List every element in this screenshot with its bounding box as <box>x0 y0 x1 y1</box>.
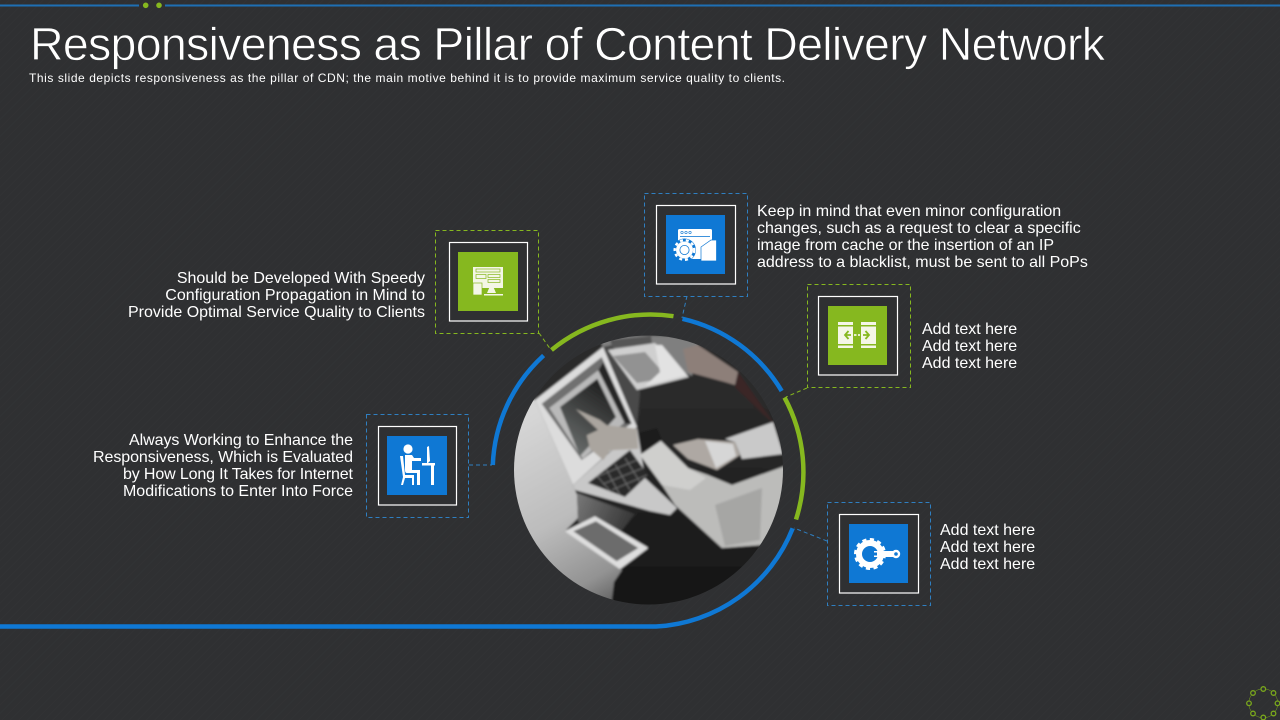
text: placeholder right upper: Add text here <box>922 338 1017 355</box>
text: enhance responsiveness: Always Working to Enhance the <box>129 432 353 449</box>
item: configuration changes icon <box>644 194 748 296</box>
icon: person sitting at computer <box>400 444 435 485</box>
text: minor configuration changes: image from cache or the insertion of an IP <box>757 237 1054 254</box>
icon: two panels with arrows <box>838 322 876 348</box>
ring arcs <box>0 315 803 626</box>
text: minor configuration changes: Keep in mind that even minor configuration <box>757 203 1061 220</box>
text: placeholder right lower: Add text here <box>940 539 1035 556</box>
icon: browser window, gear and document <box>673 229 716 262</box>
arc and baseline: bottom blue <box>0 528 793 626</box>
text: minor configuration changes: changes, such as a request to clear a specific <box>757 220 1081 237</box>
text: enhance responsiveness: Modifications to Enter Into Force <box>123 483 353 500</box>
text: enhance responsiveness: by How Long It Takes for Internet <box>123 466 354 483</box>
icon: gear and wrench <box>856 540 899 568</box>
text: enhance responsiveness: Responsiveness, Which is Evaluated <box>93 449 353 466</box>
top rule with dots <box>0 3 1280 8</box>
title: Responsiveness as Pillar of Content Delivery Network <box>30 18 1106 70</box>
arc: top green <box>552 315 674 350</box>
item: service tools icon <box>828 502 930 606</box>
text: speedy configuration propagation: Provide Optimal Service Quality to Clients <box>128 304 425 321</box>
text: speedy configuration propagation: Configuration Propagation in Mind to <box>165 287 425 304</box>
text: minor configuration changes: address to a blacklist, must be sent to all PoPs <box>757 254 1088 271</box>
text: placeholder right upper: Add text here <box>922 321 1017 338</box>
item: person at desk icon <box>366 414 468 518</box>
text: enhance responsiveness <box>93 432 354 500</box>
arc: right green <box>784 398 803 520</box>
icon: website and devices <box>473 267 503 296</box>
item: data transfer icon <box>808 284 910 388</box>
text: placeholder right upper: Add text here <box>922 355 1017 372</box>
text: minor configuration changes <box>757 203 1088 271</box>
text: placeholder right lower <box>940 522 1035 573</box>
decorative loader ring <box>1247 687 1280 720</box>
item: configuration propagation icon <box>436 230 538 334</box>
text: placeholder right upper <box>922 321 1017 372</box>
arc: left blue <box>493 356 544 465</box>
arc: upper right blue <box>682 319 782 391</box>
text: speedy configuration propagation <box>128 270 425 321</box>
dashed connectors <box>469 296 827 541</box>
subtitle: This slide depicts responsiveness as the pillar of CDN; the main motive behind it is to provide maximum service quality to clients. <box>29 71 785 85</box>
text: speedy configuration propagation: Should be Developed With Speedy <box>177 270 425 287</box>
central photo: hands on laptop <box>510 332 790 608</box>
text: placeholder right lower: Add text here <box>940 522 1035 539</box>
text: placeholder right lower: Add text here <box>940 556 1035 573</box>
